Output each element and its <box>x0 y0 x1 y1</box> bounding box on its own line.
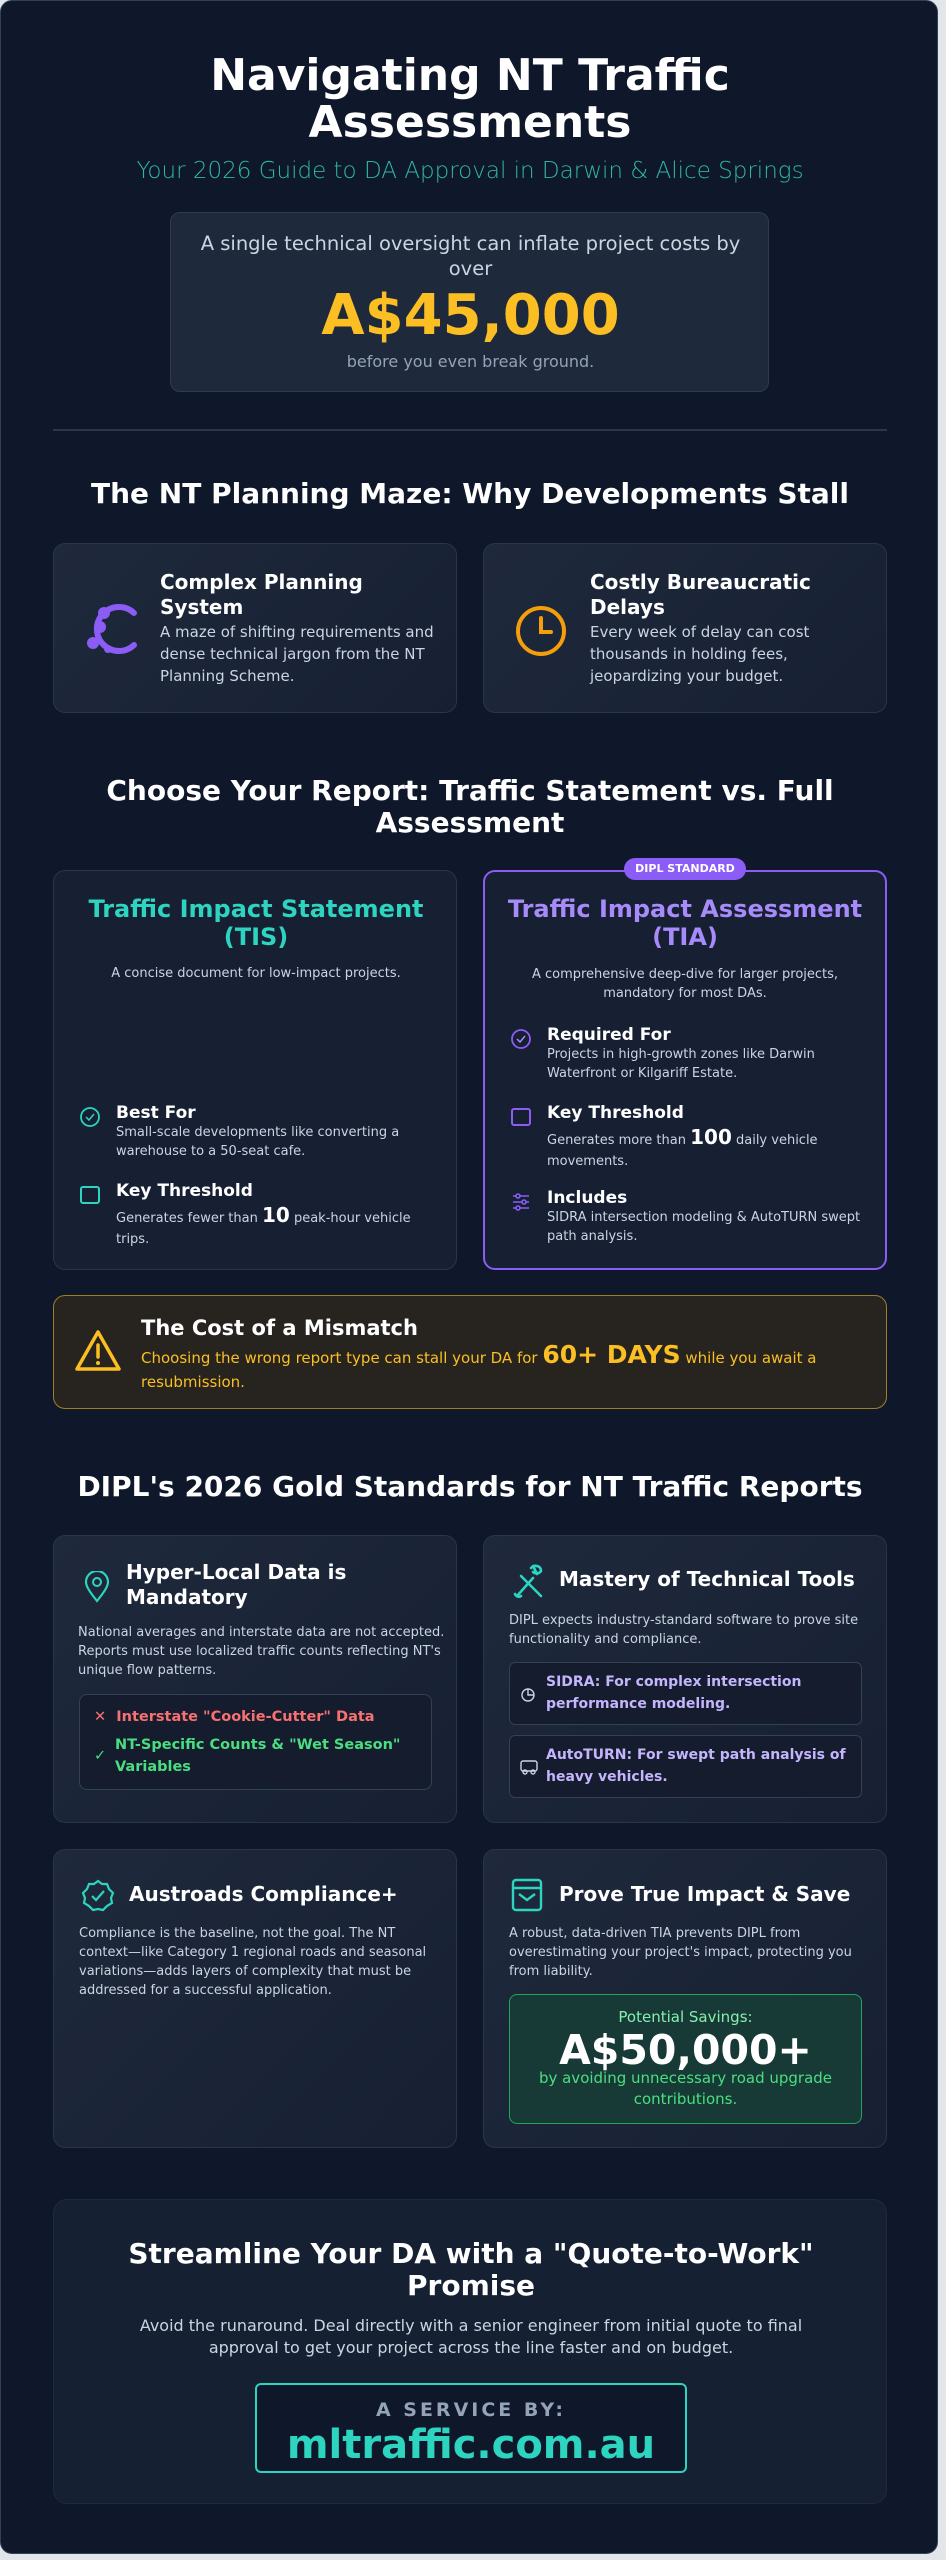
panel: costly delays <box>483 543 887 713</box>
body text: A maze of shifting requirements and dense technical jargon from the NT Planning Scheme. <box>160 623 434 685</box>
icon: sliders <box>513 1193 529 1211</box>
panel: austroads <box>53 1849 457 2148</box>
item: good: NT-Specific Counts & "Wet Season" Variables <box>115 1737 400 1775</box>
TIA description: A comprehensive deep-dive for larger projects, mandatory for most DAs. <box>532 967 838 1001</box>
title: Navigating NT Traffic <box>210 50 730 101</box>
website: mltraffic.com.au <box>287 2422 655 2468</box>
panel: complex planning <box>53 543 457 713</box>
heading: choose report: Assessment <box>376 806 564 839</box>
icon: check circle <box>511 1029 531 1049</box>
CTA heading <box>128 2237 814 2302</box>
item: key threshold: Key Threshold <box>116 1181 253 1201</box>
icon: badge check <box>82 1880 114 1912</box>
body: National averages and interstate data are not accepted. Reports must use localized traffic counts reflecting NT's unique flow patterns. <box>78 1625 444 1678</box>
hero number: A$45,000 <box>321 283 620 348</box>
heading: Hyper-Local Data is Mandatory <box>126 1560 346 1609</box>
item: includes: SIDRA intersection modeling & AutoTURN swept path analysis. <box>547 1210 860 1244</box>
heading: planning maze: The NT Planning Maze: Why Developments Stall <box>91 477 849 510</box>
icon: pin <box>84 1571 110 1603</box>
hero lead text: A single technical oversight can inflate project costs by over <box>201 232 740 280</box>
heading: gold standards: DIPL's 2026 Gold Standards for NT Traffic Reports <box>77 1470 863 1503</box>
panel: TIA <box>483 870 887 1270</box>
TIA title: (TIA) <box>652 923 718 951</box>
TIA title <box>508 895 862 951</box>
item: bad: ✕ Interstate "Cookie-Cutter" Data <box>94 1709 375 1725</box>
CTA heading: Promise <box>407 2269 535 2302</box>
item: key threshold <box>511 1103 818 1169</box>
badge: DIPL standard <box>624 858 746 880</box>
tool: AutoTURN <box>509 1735 862 1798</box>
savings box: Potential Savings: <box>618 2008 753 2026</box>
item: key threshold: Generates fewer than 10 peak-hour vehicle trips. <box>116 1203 411 1247</box>
TIS description: A concise document for low-impact projects. <box>111 966 401 981</box>
panel: TIS <box>53 870 457 1270</box>
hero stat box <box>170 212 769 392</box>
tool: SIDRA: SIDRA: For complex intersection performance modeling. <box>546 1674 801 1712</box>
item: required for: Projects in high-growth zones like Darwin Waterfront or Kilgariff Estate. <box>547 1047 815 1081</box>
body text: Every week of delay can cost thousands in holding fees, jeopardizing your budget. <box>590 623 809 685</box>
callout: cost of mismatch <box>53 1295 887 1409</box>
icon: clock <box>516 606 566 656</box>
body: A robust, data-driven TIA prevents DIPL from overestimating your project's impact, protecting you from liability. <box>509 1926 852 1979</box>
panel: CTA <box>53 2199 887 2504</box>
heading: choose report <box>106 774 834 839</box>
icon: square <box>511 1108 531 1126</box>
TIS title: (TIS) <box>224 923 288 951</box>
hero footnote: before you even break ground. <box>347 352 594 371</box>
item: key threshold <box>80 1181 411 1247</box>
item: includes: Includes <box>547 1188 627 1208</box>
comparison box <box>79 1694 432 1790</box>
tool: SIDRA <box>509 1662 862 1725</box>
icon: inbox <box>512 1878 542 1912</box>
heading: Complex Planning System <box>160 570 363 619</box>
icon: warning <box>75 1330 121 1371</box>
item: includes <box>513 1188 860 1244</box>
item: key threshold: Generates more than 100 daily vehicle movements. <box>547 1125 818 1169</box>
heading: choose report: Choose Your Report: Traffic Statement vs. Full <box>106 774 834 807</box>
item: key threshold: Key Threshold <box>547 1103 684 1123</box>
service box <box>255 2383 687 2473</box>
service box: A SERVICE BY: <box>376 2399 566 2421</box>
CTA heading: Streamline Your DA with a "Quote-to-Work" <box>128 2237 814 2270</box>
item: required for: Required For <box>547 1025 671 1045</box>
CTA body: Avoid the runaround. Deal directly with a senior engineer from initial quote to final approval to get your project across the line faster and on budget. <box>140 2316 802 2357</box>
heading: Costly Bureaucratic Delays <box>590 570 811 619</box>
icon: maze <box>87 604 137 654</box>
TIS title: Traffic Impact Statement <box>88 895 424 923</box>
heading: The Cost of a Mismatch <box>141 1316 418 1340</box>
item: best for: Best For <box>116 1103 196 1123</box>
subtitle: Your 2026 Guide to DA Approval in Darwin & Alice Springs <box>136 158 804 184</box>
panel: technical tools <box>483 1535 887 1823</box>
icon: tools <box>514 1564 542 1598</box>
title: Assessments <box>309 97 631 148</box>
TIS title <box>88 895 424 951</box>
icon: square <box>80 1186 100 1204</box>
body: DIPL expects industry-standard software to prove site functionality and compliance. <box>509 1613 858 1647</box>
item: best for: Small-scale developments like converting a warehouse to a 50-seat cafe. <box>116 1125 399 1159</box>
title <box>210 50 730 148</box>
body: Choosing the wrong report type can stall your DA for 60+ DAYS while you await a resubmission. <box>141 1340 816 1391</box>
badge: DIPL standard: DIPL STANDARD <box>635 862 735 875</box>
savings box <box>509 1994 862 2124</box>
item: required for <box>511 1025 815 1081</box>
icon: check circle <box>80 1107 100 1127</box>
savings number: A$50,000+ <box>559 2026 812 2074</box>
savings box: by avoiding unnecessary road upgrade contributions. <box>539 2069 832 2108</box>
TIA title: Traffic Impact Assessment <box>508 895 862 923</box>
heading: Prove True Impact & Save <box>559 1882 850 1906</box>
body: Compliance is the baseline, not the goal. The NT context—like Category 1 regional roads and seasonal variations—adds layers of complexity that must be addressed for a successful application. <box>79 1926 426 1998</box>
heading: Mastery of Technical Tools <box>559 1567 855 1591</box>
panel: hyper-local data <box>53 1535 457 1823</box>
panel: prove impact <box>483 1849 887 2148</box>
heading: Austroads Compliance+ <box>129 1882 398 1906</box>
item: best for <box>80 1103 399 1159</box>
icon: pie <box>521 1688 535 1702</box>
icon: truck <box>520 1760 538 1775</box>
tool: AutoTURN: AutoTURN: For swept path analysis of heavy vehicles. <box>546 1747 846 1785</box>
item: good: ✓ <box>94 1748 106 1764</box>
